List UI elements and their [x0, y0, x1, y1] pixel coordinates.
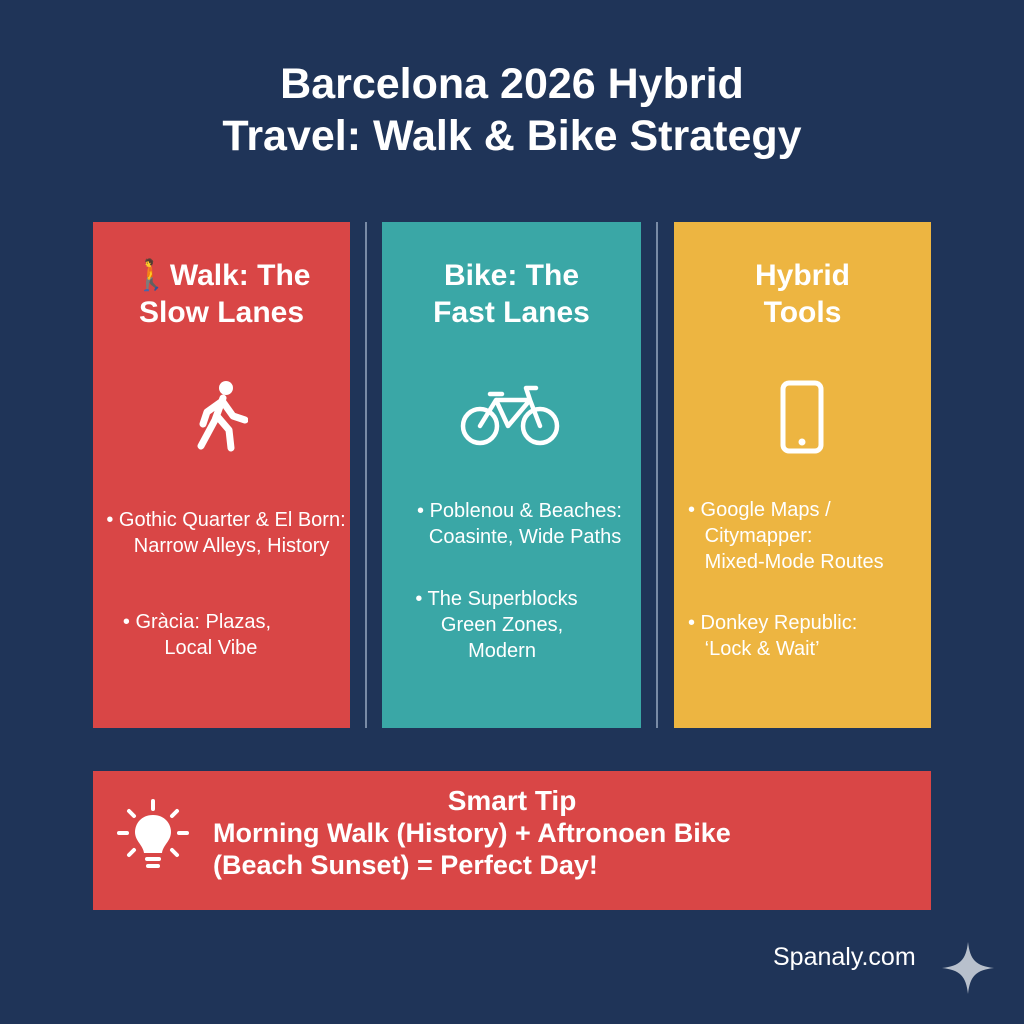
bullets: walk — [106, 509, 346, 557]
tip text: (Beach Sunset) = Perfect Day! — [213, 850, 598, 880]
title: Travel: Walk & Bike Strategy — [222, 112, 802, 160]
heading: walk — [133, 258, 310, 329]
panel: bike: • The Superblocks — [415, 588, 578, 610]
title — [222, 60, 802, 160]
panel: hybrid tools: • Donkey Republic: — [688, 612, 857, 634]
panel: bike — [382, 222, 641, 728]
panel: walk: Local Vibe — [164, 637, 257, 659]
bullets: bike — [417, 500, 622, 548]
heading: tools: Hybrid — [755, 259, 850, 292]
bullets: tools: • Google Maps / — [688, 499, 831, 521]
icon: light bulb — [117, 799, 189, 868]
tip text: Morning Walk (History) + Aftronoen Bike — [213, 818, 731, 848]
panel: hybrid tools — [674, 222, 931, 728]
heading: walk: 🚶Walk: The — [133, 259, 310, 292]
smart tip box — [93, 771, 931, 910]
heading: bike: Fast Lanes — [433, 296, 590, 329]
bullets: walk: • Gothic Quarter & El Born: — [106, 509, 346, 531]
bullets: tools — [688, 499, 884, 573]
panel: walk — [93, 222, 350, 728]
icon: bicycle — [460, 386, 560, 446]
panel: bike: Green Zones, — [441, 614, 563, 636]
heading: bike — [433, 259, 590, 329]
heading: tools: Tools — [764, 296, 841, 329]
icon: walker — [198, 381, 248, 452]
heading: bike: Bike: The — [444, 259, 579, 292]
panel: walk: • Gràcia: Plazas, — [123, 611, 271, 633]
bullets: tools: Mixed-Mode Routes — [705, 551, 884, 573]
title: Barcelona 2026 Hybrid — [280, 60, 744, 108]
panel: hybrid tools: ‘Lock & Wait’ — [705, 638, 820, 660]
panel: bike: Modern — [468, 640, 536, 662]
tip heading: Smart Tip — [448, 785, 576, 816]
bullets: bike: • Poblenou & Beaches: — [417, 500, 622, 522]
bullets: walk: Narrow Alleys, History — [134, 535, 329, 557]
brand: Spanaly.com — [773, 943, 916, 971]
heading: walk: Slow Lanes — [139, 296, 304, 329]
icon: phone — [780, 380, 824, 454]
heading: tools — [755, 259, 850, 329]
bullets: tools: Citymapper: — [705, 525, 812, 547]
tip text — [213, 818, 731, 880]
icon: sparkle — [942, 942, 994, 994]
bullets: bike: Coasinte, Wide Paths — [429, 526, 621, 548]
